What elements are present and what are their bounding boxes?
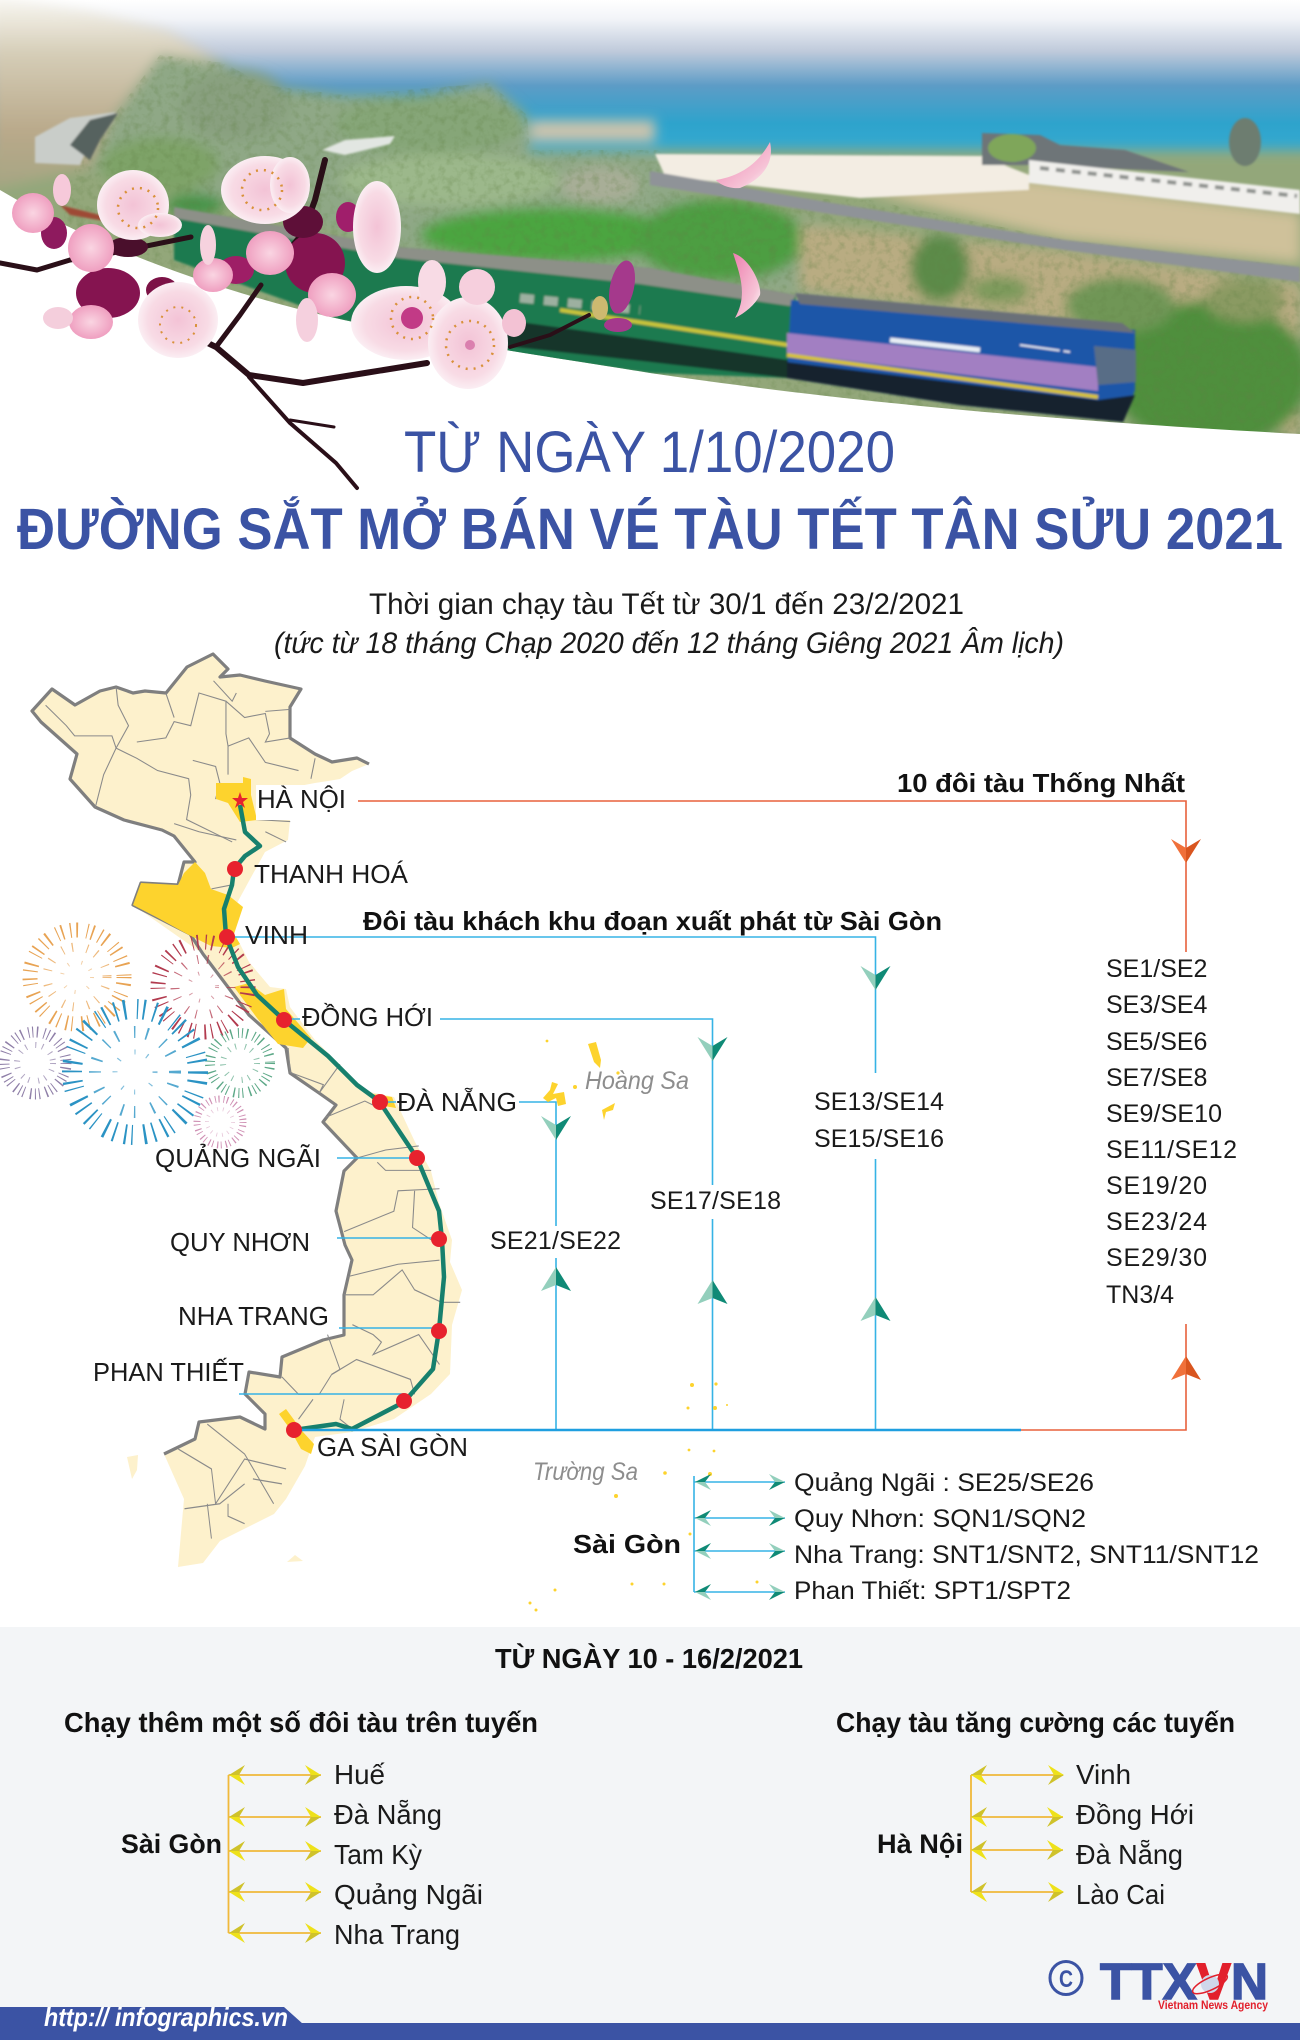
station labels: HÀ NỘI <box>257 784 346 814</box>
red burst <box>158 942 248 1032</box>
destinations: Lào Cai <box>1076 1879 1165 1910</box>
station labels: THANH HOÁ <box>254 859 409 889</box>
destinations <box>334 1759 483 1950</box>
bud <box>592 258 639 332</box>
destinations: Vinh <box>1076 1759 1131 1790</box>
Sài Gòn short routes <box>573 1469 1259 1605</box>
origin label: Hà Nội <box>877 1829 963 1859</box>
station labels: VINH <box>245 920 308 950</box>
title line 1: TỪ NGÀY 1/10/2020 <box>404 420 895 485</box>
connector lines <box>694 1476 785 1592</box>
panel background <box>0 1627 1300 2040</box>
rocks and shore <box>530 120 655 142</box>
station labels <box>93 784 517 1462</box>
red carriage glimpse <box>60 205 102 222</box>
station labels: ĐÀ NẴNG <box>397 1087 517 1117</box>
green carriages <box>174 207 796 378</box>
train codes: Thống Nhất: SE5/SE6 <box>1106 1028 1207 1056</box>
label Sài Gòn: Sài Gòn <box>573 1529 681 1559</box>
orange burst <box>30 930 124 1024</box>
train codes: Thống Nhất: SE9/SE10 <box>1106 1100 1222 1128</box>
destinations: Đà Nẵng <box>1076 1839 1183 1870</box>
stamens <box>118 170 494 369</box>
station labels: QUẢNG NGÃI <box>155 1143 321 1173</box>
logo: TTXVN <box>1050 1953 1269 2012</box>
land <box>32 654 462 1567</box>
destinations: Tam Kỳ <box>334 1839 422 1870</box>
far carriages <box>35 112 116 165</box>
route arrowheads <box>541 839 1201 1380</box>
dark flower centres <box>41 202 360 318</box>
globe mark <box>1190 1971 1230 1997</box>
destinations: Nha Trang <box>334 1919 460 1950</box>
station labels: QUY NHƠN <box>170 1227 310 1257</box>
dry land below road <box>800 225 1300 434</box>
destinations: Đà Nẵng <box>334 1799 442 1830</box>
heading: 10 đôi tàu Thống Nhất: 10 đôi tàu Thống Nhất <box>897 768 1185 798</box>
left group heading: Chạy thêm một số đôi tàu trên tuyến <box>64 1707 538 1738</box>
province lines north <box>46 681 439 1276</box>
beach <box>655 154 1029 198</box>
branches <box>0 160 589 488</box>
dry land above road <box>866 180 1300 262</box>
station labels: NHA TRANG <box>178 1301 329 1331</box>
destinations: Huế <box>334 1759 385 1790</box>
tree by building <box>988 134 1036 162</box>
destinations <box>794 1469 1259 1605</box>
green burst <box>210 1033 270 1093</box>
western border <box>32 654 369 1454</box>
pink burst <box>197 1099 243 1145</box>
station labels: PHAN THIẾT <box>93 1357 244 1387</box>
origin label: Sài Gòn <box>121 1829 222 1859</box>
train codes: Thống Nhất: SE23/24 <box>1106 1208 1207 1236</box>
train codes: Thống Nhất: SE1/SE2 <box>1106 955 1207 983</box>
Sài Gòn base line <box>298 1429 1021 1431</box>
building <box>982 133 1189 172</box>
panel: extra trains 10-16/2 <box>0 1627 1300 2040</box>
footer tab <box>0 2007 303 2040</box>
map of Vietnam <box>32 654 462 1567</box>
route lines <box>227 801 1186 1430</box>
destinations: Quy Nhơn: SQN1/SQN2 <box>794 1505 1086 1533</box>
sky and sea <box>0 12 1300 160</box>
footer bar <box>0 2002 1300 2040</box>
train codes: SE13-16 <box>814 1088 944 1153</box>
station dots <box>219 861 447 1438</box>
lone tree <box>1229 118 1261 166</box>
texture over land <box>60 50 1300 440</box>
cyan routes <box>227 937 876 1430</box>
destinations <box>1076 1759 1194 1910</box>
railway line <box>224 805 444 1430</box>
arrowheads <box>971 1765 1064 1902</box>
Sài Gòn routes <box>121 1759 483 1950</box>
Hà Nội routes <box>877 1759 1194 1910</box>
province lines south <box>178 1270 460 1539</box>
vegetation upper <box>90 55 830 300</box>
islands <box>127 1040 758 1612</box>
train codes: Thống Nhất <box>1106 955 1237 1309</box>
train codes: Thống Nhất: SE7/SE8 <box>1106 1064 1207 1092</box>
connectors <box>971 1775 1063 1892</box>
blue burst <box>72 1009 198 1135</box>
blossoms <box>12 156 526 389</box>
label: Trường Sa: Trường Sa <box>533 1458 638 1486</box>
header photo: train on coast <box>0 0 1300 450</box>
locomotive <box>786 299 1136 402</box>
window strip <box>520 298 640 310</box>
train codes: SE13-16: SE13/SE14 <box>814 1088 944 1116</box>
right green scrub <box>1124 294 1300 433</box>
footer url: http:// infographics.vn <box>44 2002 288 2032</box>
subtitle: Thời gian chạy tàu Tết từ 30/1 đến 23/2/2021 <box>369 588 964 621</box>
falling petals <box>716 142 771 318</box>
station labels: ĐỒNG HỚI <box>302 1002 433 1032</box>
branch of peach blossom <box>0 156 639 488</box>
arrowheads <box>229 1765 321 1943</box>
train codes: Thống Nhất: SE11/SE12 <box>1106 1136 1237 1164</box>
copyright mark: C <box>1059 1966 1073 1993</box>
fireworks <box>4 930 270 1145</box>
destinations: Phan Thiết: SPT1/SPT2 <box>794 1577 1071 1605</box>
destinations: Quảng Ngãi <box>334 1879 483 1910</box>
train codes: Thống Nhất: SE19/20 <box>1106 1172 1207 1200</box>
panel heading: TỪ NGÀY 10 - 16/2/2021 <box>495 1643 803 1674</box>
connectors <box>228 1775 321 1933</box>
train codes: Thống Nhất: SE3/SE4 <box>1106 991 1208 1019</box>
wordmark: TTXVN <box>1100 1953 1268 2010</box>
hillside <box>0 0 265 190</box>
right group heading: Chạy tàu tăng cường các tuyến <box>836 1707 1235 1738</box>
train codes: SE17/SE18: SE17/SE18 <box>650 1187 781 1215</box>
land base <box>0 150 1300 450</box>
agency name: Vietnam News Agency <box>1158 2000 1269 2012</box>
train codes: SE21/SE22: SE21/SE22 <box>490 1227 621 1255</box>
purple burst <box>4 1032 66 1094</box>
flower hearts <box>401 307 475 350</box>
train codes: Thống Nhất: SE29/30 <box>1106 1244 1207 1272</box>
Thống Nhất orange route <box>358 801 1186 1430</box>
white wall <box>1029 160 1300 214</box>
icon: Hà Nội star <box>232 792 248 808</box>
white label box Hà Nội <box>256 785 348 820</box>
subtitle italic: (tức từ 18 tháng Chạp 2020 đến 12 tháng Giêng 2021 Âm lịch) <box>274 627 1064 660</box>
destinations: Đồng Hới <box>1076 1799 1194 1830</box>
highlighted provinces <box>133 777 396 1454</box>
destinations: Nha Trang: SNT1/SNT2, SNT11/SNT12 <box>794 1541 1259 1569</box>
road <box>650 171 1300 282</box>
train codes: Thống Nhất: TN3/4 <box>1106 1281 1174 1309</box>
heading: Đôi tàu khách khu đoạn: Đôi tàu khách khu đoạn xuất phát từ Sài Gòn <box>363 906 942 936</box>
train codes: SE13-16: SE15/SE16 <box>814 1125 944 1153</box>
destinations: Quảng Ngãi : SE25/SE26 <box>794 1469 1094 1497</box>
copyright mark <box>1050 1962 1082 1994</box>
arrowheads <box>695 1474 785 1600</box>
station labels: GA SÀI GÒN <box>317 1432 468 1462</box>
label: Hoàng Sa: Hoàng Sa <box>585 1067 689 1095</box>
